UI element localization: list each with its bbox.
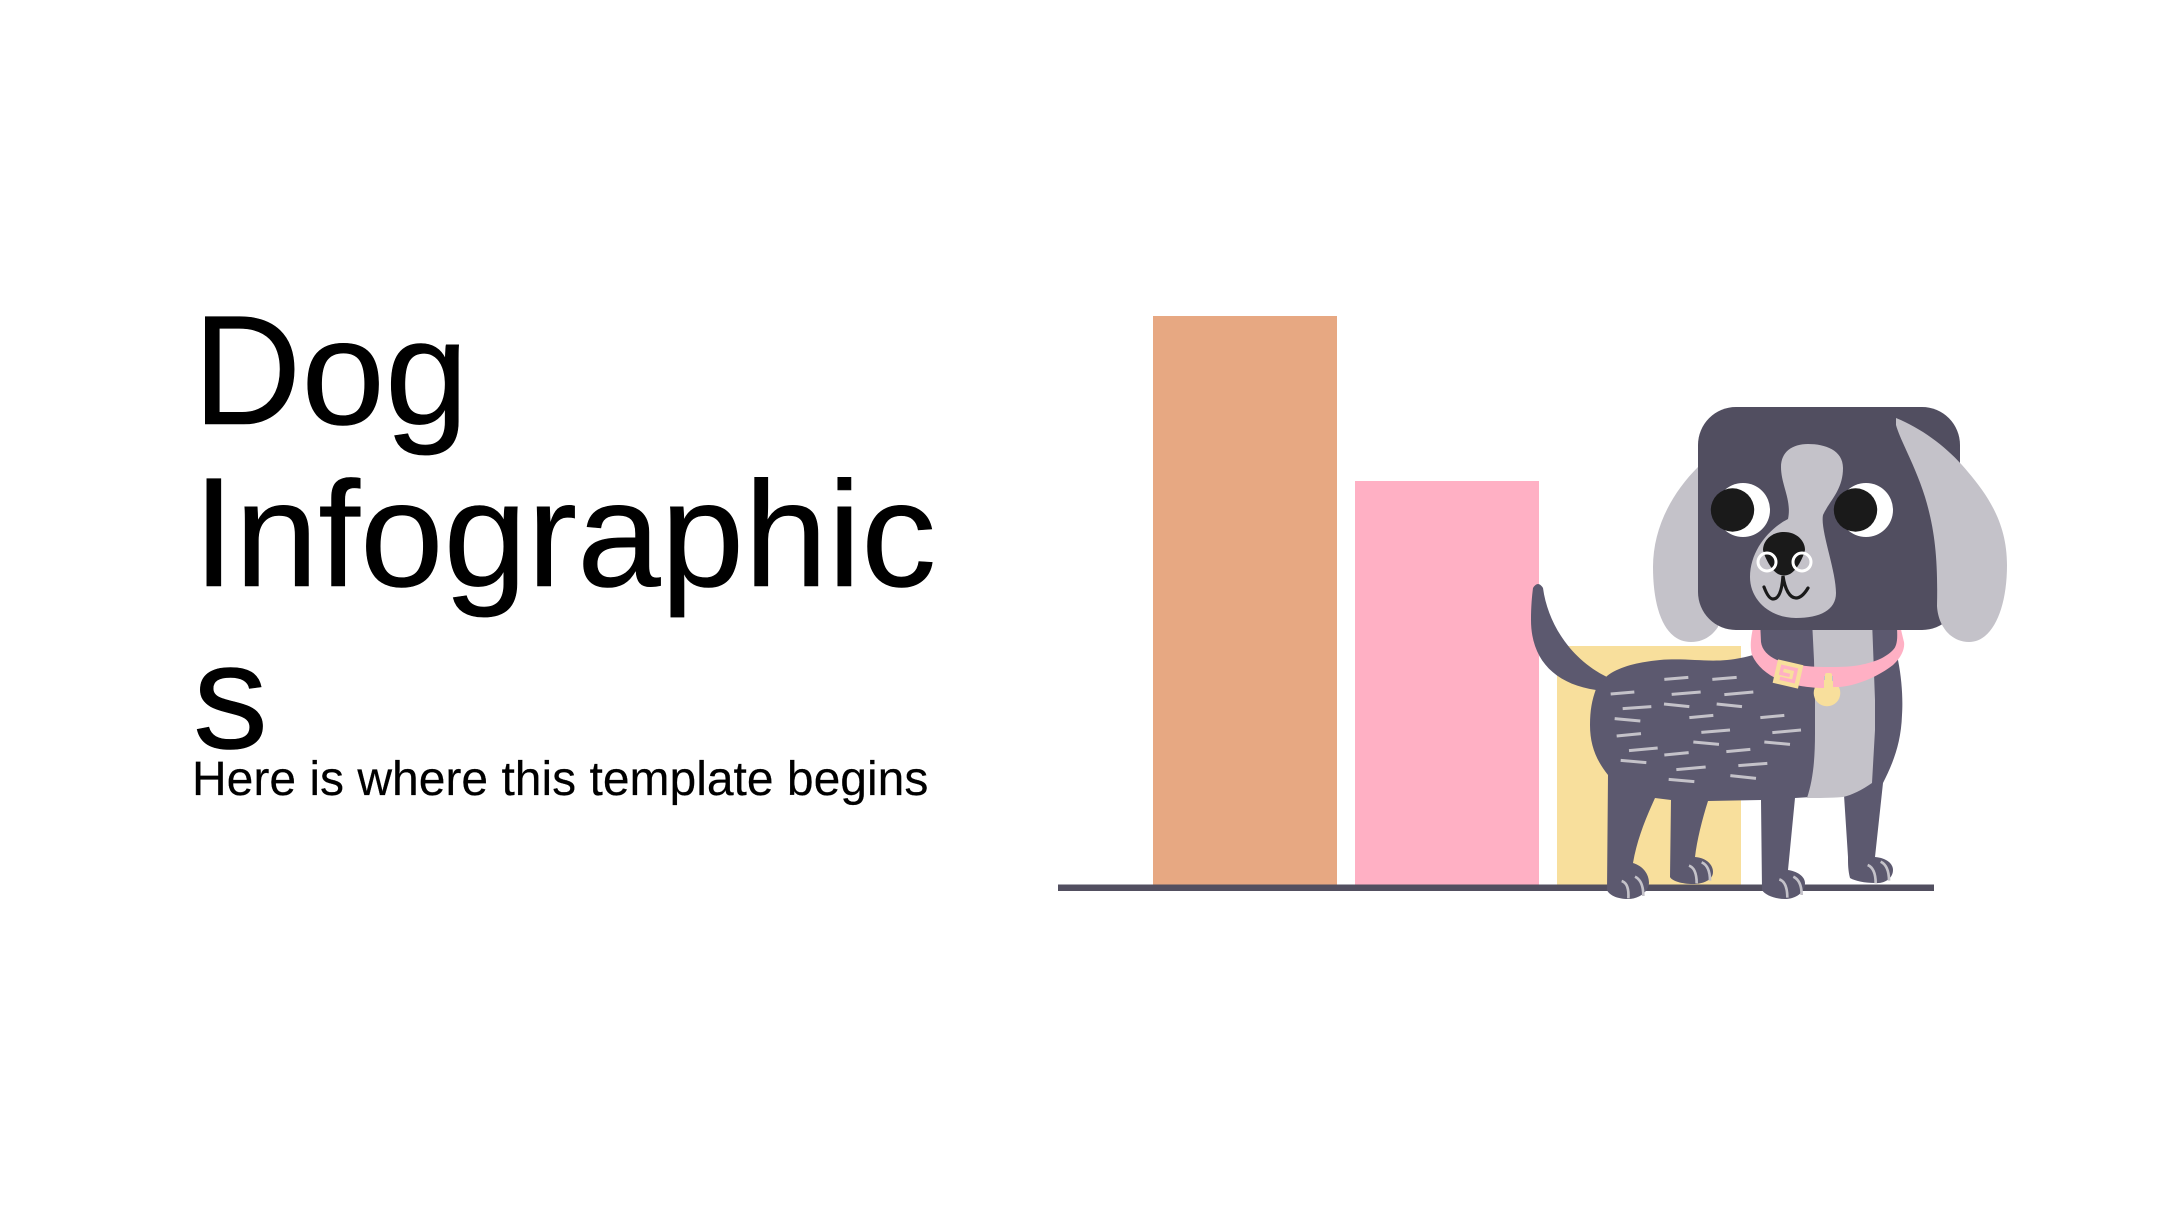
- dog chest patch: [1807, 620, 1875, 798]
- face blaze and muzzle: [1750, 444, 1843, 618]
- title: nfographic: [235, 450, 936, 618]
- title: og: [301, 288, 468, 456]
- dog claws: [1622, 862, 1889, 898]
- dog head: [1698, 407, 1960, 630]
- title: [193, 283, 936, 780]
- dog body and legs: [1590, 620, 1902, 899]
- bar: orange: [1153, 316, 1337, 885]
- dog fur marks: [1611, 677, 1801, 782]
- ground line: [1058, 884, 1934, 891]
- bar chart: [1058, 316, 1934, 891]
- bar: yellow: [1557, 646, 1741, 885]
- dog collar: [1751, 620, 1904, 688]
- collar buckle: [1773, 659, 1803, 689]
- title: I: [193, 445, 235, 619]
- title: s: [193, 612, 268, 780]
- bar: pink: [1355, 481, 1539, 885]
- illustration: dog: [1531, 407, 2007, 899]
- collar tag stem: [1825, 673, 1832, 685]
- nose: [1758, 532, 1811, 576]
- left eye: [1711, 483, 1770, 537]
- subtitle: Here is where this template begins: [192, 753, 928, 806]
- collar tag: [1814, 673, 1840, 706]
- right ear: [1896, 418, 2007, 642]
- title: D: [193, 283, 301, 457]
- mouth: [1764, 576, 1808, 599]
- dog tail: [1531, 584, 1607, 690]
- left ear: [1653, 467, 1720, 642]
- right eye: [1834, 483, 1893, 537]
